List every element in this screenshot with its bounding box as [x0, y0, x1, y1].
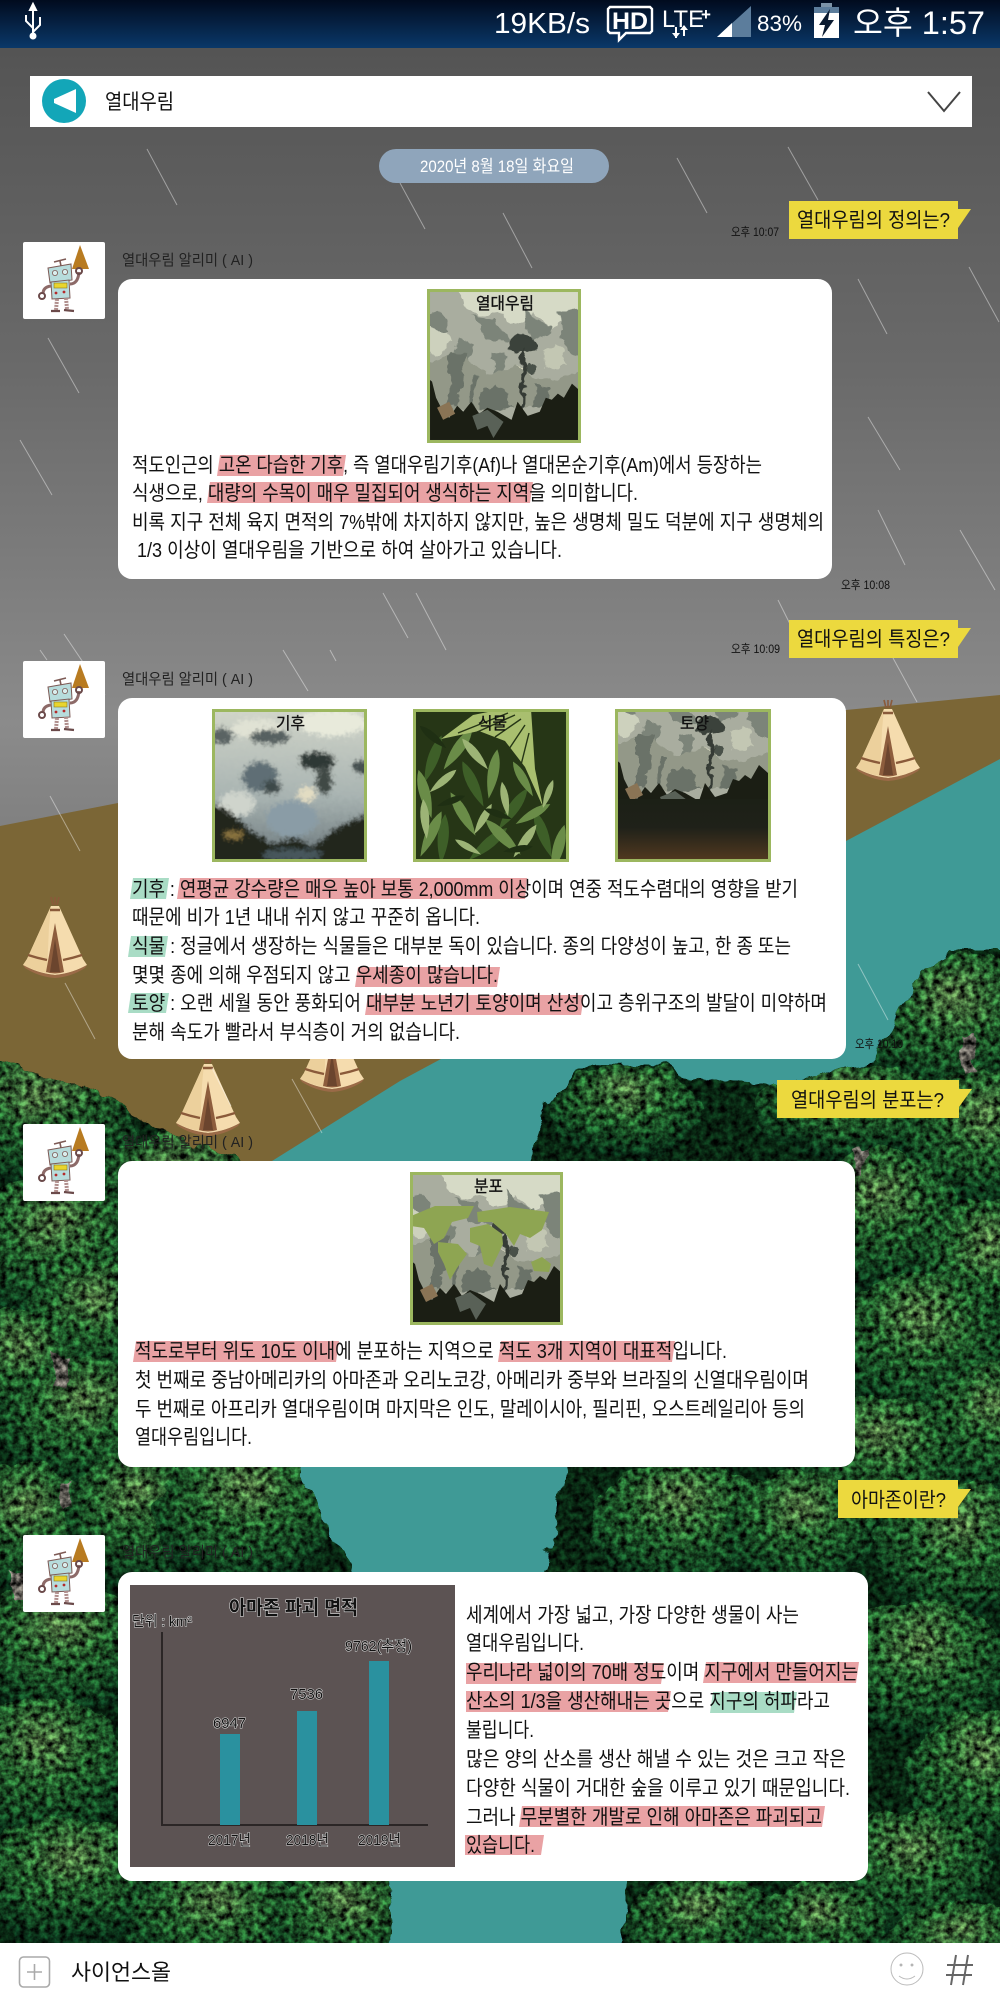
amazon text: 많은 양의 산소를 생산 해낼 수 있는 것은 크고 작은	[466, 1748, 846, 1771]
status bar: 오후 1:57	[853, 5, 985, 41]
bar chart: amazon deforestation area: 아마존 파괴 면적	[229, 1597, 358, 1619]
forest of trees	[0, 940, 1000, 2000]
sender name 4: 열대우림 알리미 ( AI )	[122, 1544, 253, 1561]
tent centre	[176, 1055, 240, 1136]
bar chart: amazon deforestation area: 7536	[290, 1686, 323, 1703]
tent right	[856, 700, 920, 781]
icon: LTE: +	[701, 5, 711, 24]
features text: 때문에 비가 1년 내내 쉬지 않고 꾸준히 옵니다.	[132, 906, 480, 929]
question bubble: features: 열대우림의 특징은?	[797, 628, 950, 651]
tent behind bubble	[300, 1011, 364, 1092]
distribution text	[135, 1340, 809, 1449]
definition text: 1/3 이상이 열대우림을 기반으로 하여 살아가고 있습니다.	[137, 539, 562, 562]
image: soil	[615, 709, 771, 862]
panel: features: 기후	[276, 714, 305, 733]
sender name 3: 열대우림 알리미 ( AI )	[122, 1134, 253, 1151]
avatar: robot 3	[23, 1124, 105, 1201]
definition text: 비록 지구 전체 육지 면적의 7%밖에 차지하지 않지만, 높은 생명체 밀도 덕분에 지구 생명체의	[132, 511, 824, 534]
amazon text	[466, 1604, 858, 1857]
image: rainforest	[427, 289, 581, 443]
avatar: robot 2	[23, 661, 105, 738]
amazon text: 다양한 식물이 거대한 숲을 이루고 있기 때문입니다.	[466, 1777, 850, 1800]
question bubble: definition: 오후 10:07	[731, 225, 779, 239]
image: world map	[410, 1172, 563, 1325]
features text: 토양 : 오랜 세월 동안 풍화되어 대부분 노년기 토양이며 산성이고 층위구조의 발달이 미약하며	[132, 992, 827, 1015]
amazon text: 불립니다.	[466, 1719, 534, 1742]
bottom input bar	[0, 1943, 1000, 2000]
question bubble: definition	[731, 201, 971, 239]
icon: chevron	[928, 92, 960, 111]
highlights	[133, 1341, 675, 1362]
panel: features: 토양	[680, 714, 709, 733]
bar chart: amazon deforestation area	[130, 1585, 455, 1867]
bar chart: amazon deforestation area: 단위 : km²	[132, 1613, 192, 1629]
status bar: 83%	[757, 11, 802, 36]
amazon text: 우리나라 넓이의 70배 정도이며 지구에서 만들어지는	[466, 1661, 858, 1684]
status bar: 19KB/s	[494, 8, 590, 40]
icon: HD bubble: HD	[612, 8, 648, 35]
highlights	[128, 878, 169, 1013]
question bubble: amazon: 아마존이란?	[851, 1489, 946, 1512]
icon: hash	[946, 1955, 973, 1985]
bar chart: amazon deforestation area: 2017년	[208, 1832, 251, 1849]
features text: 분해 속도가 빨라서 부식층이 거의 없습니다.	[132, 1021, 460, 1044]
amazon text: 열대우림입니다.	[466, 1632, 584, 1655]
amazon text: 있습니다.	[466, 1834, 535, 1857]
time 10:10: 오후 10:10	[855, 1037, 903, 1051]
bar chart: amazon deforestation area: 9762(추정)	[345, 1638, 412, 1655]
icon: HD bubble	[608, 7, 652, 40]
icon: plus box	[20, 1957, 50, 1987]
features text: 식물 : 정글에서 생장하는 식물들은 대부분 독이 있습니다. 종의 다양성이 높고, 한 종 또는	[132, 935, 791, 958]
panel: distribution	[118, 1160, 855, 1467]
date pill	[379, 149, 609, 183]
features text: 몇몇 종에 의해 우점되지 않고 우세종이 많습니다.	[132, 964, 498, 987]
distribution text: 첫 번째로 중남아메리카의 아마존과 오리노코강, 아메리카 중부와 브라질의 신열대우림이며	[135, 1369, 809, 1392]
amazon text: 그러나 무분별한 개발로 인해 아마존은 파괴되고	[466, 1806, 822, 1829]
amazon text: 산소의 1/3을 생산해내는 곳으로 지구의 허파라고	[466, 1690, 830, 1713]
panel: definition: 열대우림	[476, 294, 534, 313]
question bubble: features	[731, 620, 971, 658]
panel: distribution: 분포	[474, 1178, 503, 1196]
avatar: robot 1	[23, 242, 105, 319]
panel: features: 식물	[478, 714, 507, 733]
image: plants	[413, 709, 569, 862]
teal river	[250, 759, 1000, 1950]
question bubble: amazon	[838, 1480, 971, 1518]
date pill: 2020년 8월 18일 화요일	[420, 157, 574, 176]
question bubble: distribution: 열대우림의 분포는?	[791, 1089, 944, 1112]
icon: smile	[891, 1953, 923, 1985]
panel: definition	[118, 277, 832, 579]
bar chart: amazon deforestation area: 2019년	[358, 1832, 401, 1849]
avatar: robot 4	[23, 1535, 105, 1612]
time 10:08: 오후 10:08	[841, 578, 890, 592]
definition text	[132, 454, 824, 562]
highlights	[207, 455, 533, 503]
bar chart: amazon deforestation area: 6947	[213, 1715, 246, 1732]
brown hill	[0, 695, 1000, 1200]
definition text: 식생으로, 대량의 수목이 매우 밀집되어 생식하는 지역을 의미합니다.	[132, 482, 638, 505]
features text: 기후 : 연평균 강수량은 매우 높아 보통 2,000mm 이상이며 연중 적도수렴대의 영향을 받기	[132, 878, 798, 901]
distribution text: 적도로부터 위도 10도 이내에 분포하는 지역으로 적도 3개 지역이 대표적입니다.	[135, 1340, 727, 1363]
tent left	[23, 897, 87, 978]
icon: LTE: LTE	[662, 6, 704, 33]
sender name 1: 열대우림 알리미 ( AI )	[122, 252, 253, 269]
image: climate	[212, 709, 367, 862]
bar chart: amazon deforestation area: 2018년	[286, 1832, 329, 1849]
features text	[132, 878, 827, 1044]
highlights	[465, 1662, 859, 1855]
panel: features	[118, 659, 846, 1059]
distribution text: 열대우림입니다.	[135, 1426, 252, 1449]
icon: battery	[814, 3, 839, 38]
rain lines	[20, 147, 999, 1133]
icon: usb	[26, 4, 40, 38]
status bar	[0, 0, 1000, 48]
question bubble: definition: 열대우림의 정의는?	[797, 209, 950, 232]
amazon text: 세계에서 가장 넓고, 가장 다양한 생물이 사는	[466, 1604, 799, 1627]
question bubble: distribution	[777, 1080, 972, 1118]
icon: back speaker	[42, 79, 86, 123]
icon: signal	[717, 6, 751, 37]
question bubble: features: 오후 10:09	[731, 642, 780, 656]
chat header bar	[30, 76, 972, 127]
bottom input bar: 사이언스올	[71, 1960, 171, 1985]
panel: amazon	[118, 1572, 868, 1881]
definition text: 적도인근의 고온 다습한 기후, 즉 열대우림기후(Af)나 열대몬순기후(Am)에서 등장하는	[132, 454, 762, 477]
chat header bar: 열대우림	[105, 91, 174, 114]
sender name 2: 열대우림 알리미 ( AI )	[122, 671, 253, 688]
distribution text: 두 번째로 아프리카 열대우림이며 마지막은 인도, 말레이시아, 필리핀, 오스트레일리아 등의	[135, 1398, 805, 1421]
